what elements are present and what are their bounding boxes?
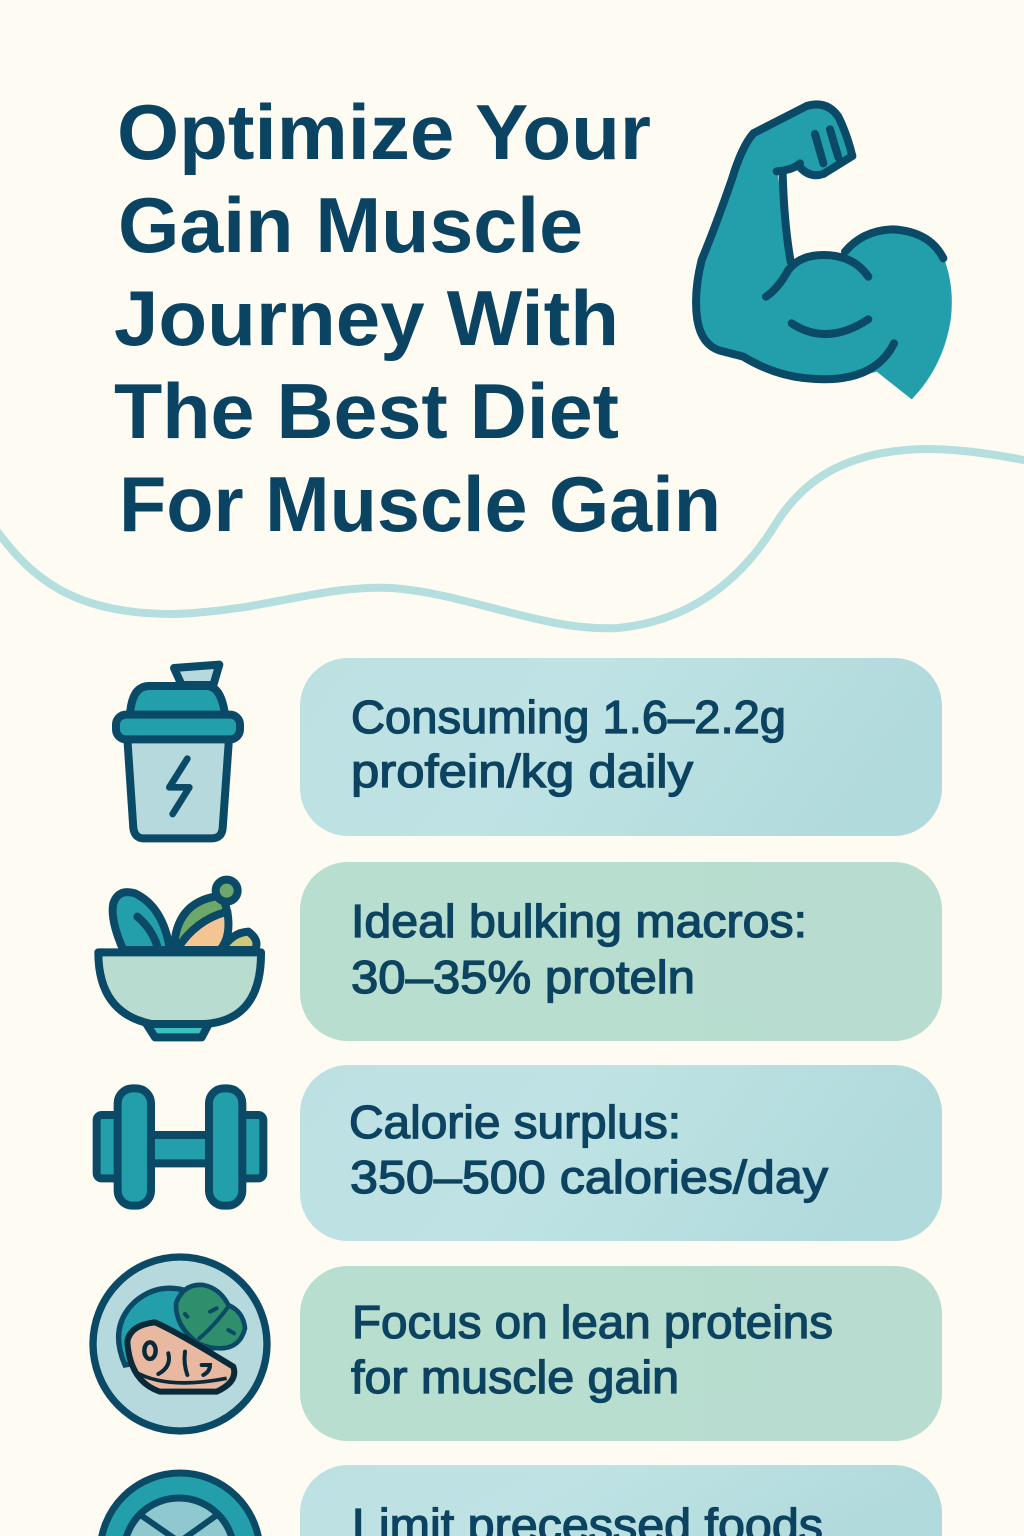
panel: calorie surplus (300, 1065, 942, 1241)
title: Gain Muscle (118, 181, 583, 269)
title: For Muscle Gain (119, 460, 721, 548)
panel: protein intake: Consuming 1.6–2.2g (351, 691, 786, 743)
panel: protein intake (300, 658, 942, 836)
panel: protein intake: profein/kg daily (351, 745, 693, 797)
icon: protein shaker (116, 665, 240, 838)
panel: calorie surplus: Calorie surplus: (349, 1096, 681, 1148)
panel: bulking macros: 30–35% proteln (351, 951, 695, 1003)
panel: lean proteins (300, 1266, 942, 1441)
icon: no processed food sign (100, 1473, 260, 1536)
title (114, 88, 721, 548)
panel: lean proteins: Focus on lean proteins (352, 1296, 833, 1348)
panel: bulking macros (300, 862, 942, 1041)
title: The Best Diet (114, 367, 619, 455)
panel: bulking macros: Ideal bulking macros: (351, 895, 807, 947)
wave divider (0, 449, 1024, 628)
panel: limit processed foods (300, 1465, 942, 1536)
icon: plate with chicken and greens (93, 1257, 267, 1431)
icon: salad bowl (98, 880, 261, 1037)
title: Journey With (114, 274, 619, 362)
icon: flexed muscle arm (696, 104, 952, 399)
panel: calorie surplus: 350–500 calories/day (350, 1151, 828, 1203)
icon: dumbbell (97, 1088, 263, 1206)
panel: lean proteins: for muscle gain (351, 1351, 679, 1403)
title: Optimize Your (117, 88, 651, 176)
